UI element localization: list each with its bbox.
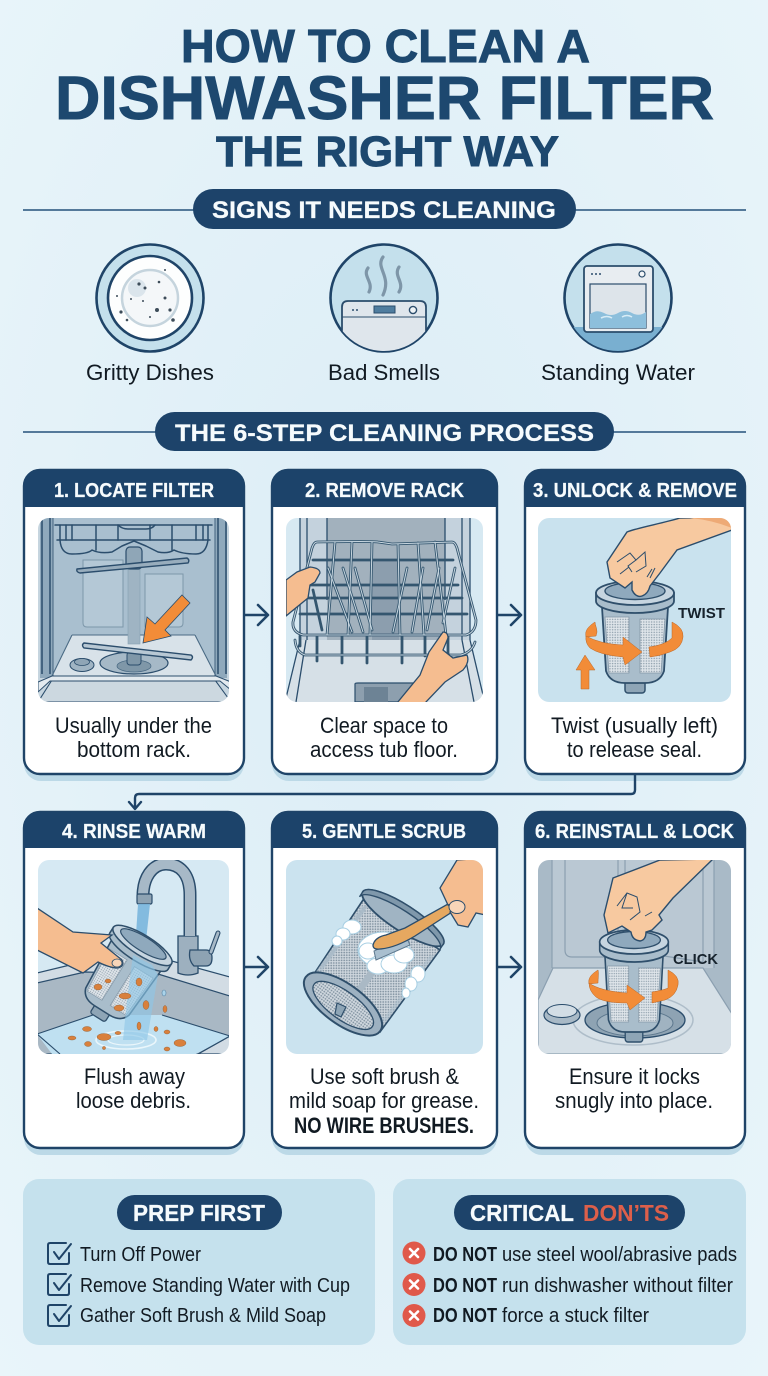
- panel: critical don'ts: [393, 1179, 746, 1345]
- caption: step 4: loose debris.: [76, 1088, 191, 1113]
- caption: step 3: Twist (usually left): [551, 713, 718, 738]
- label: bad smells: Bad Smells: [328, 360, 440, 385]
- section heading: signs it needs cleaning: [23, 189, 746, 229]
- arrow: step 1 to 2: [245, 605, 268, 625]
- heading: critical don'ts: [454, 1195, 685, 1230]
- title: THE RIGHT WAY: [216, 128, 559, 176]
- warning list: DO NOT: [433, 1305, 497, 1327]
- heading: prep first: PREP FIRST: [133, 1200, 265, 1226]
- heading: step 6: 6. REINSTALL & LOCK: [535, 821, 735, 843]
- warning list: use steel wool/abrasive pads: [502, 1244, 737, 1266]
- illustration: scrubbing filter with brush: [286, 858, 486, 1054]
- heading: critical don'ts: CRITICAL: [470, 1200, 574, 1226]
- caption: step 4: [76, 1064, 191, 1113]
- caption: step 3: [551, 713, 718, 762]
- icon: bad smells appliance: [330, 244, 438, 360]
- illustration: dishwasher interior with arrow: [38, 518, 231, 702]
- arrow: step 3 to 4 connector: [129, 775, 635, 809]
- arrow: step 4 to 5: [245, 957, 268, 977]
- label: gritty dishes: Gritty Dishes: [86, 360, 214, 385]
- icon: gritty dishes plate: [96, 244, 204, 352]
- illustration: hands removing rack: [286, 518, 483, 703]
- caption: step 5: [289, 1064, 479, 1138]
- checklist: [48, 1243, 350, 1327]
- caption: step 3: to release seal.: [567, 737, 702, 762]
- heading: step 1: 1. LOCATE FILTER: [54, 480, 215, 502]
- title: HOW TO CLEAN A: [181, 20, 590, 72]
- illustration: rinsing filter under faucet: [37, 860, 230, 1054]
- label: standing water: Standing Water: [541, 360, 695, 385]
- warning list: force a stuck filter: [502, 1305, 649, 1327]
- caption: step 5: NO WIRE BRUSHES.: [294, 1113, 474, 1138]
- arrow: step 2 to 3: [498, 605, 521, 625]
- heading: step 5: 5. GENTLE SCRUB: [302, 821, 466, 843]
- caption: step 6: snugly into place.: [555, 1088, 713, 1113]
- heading: step 2: 2. REMOVE RACK: [305, 480, 465, 502]
- caption: step 1: Usually under the: [55, 713, 212, 738]
- icon: standing water dishwasher: [563, 243, 673, 353]
- caption: step 6: [555, 1064, 713, 1113]
- heading: critical don'ts: DON’TS: [583, 1200, 669, 1226]
- heading: step 4: 4. RINSE WARM: [62, 821, 206, 843]
- panel: prep first: [23, 1179, 375, 1345]
- warning list: DO NOT: [433, 1275, 497, 1297]
- panel: step 6 reinstall and lock: [525, 812, 745, 1155]
- caption: step 6: Ensure it locks: [569, 1064, 700, 1089]
- warning list: [402, 1242, 737, 1327]
- title: DISHWASHER FILTER: [55, 64, 714, 132]
- section heading: the 6-step cleaning process: THE 6-STEP CLEANING PROCESS: [175, 420, 594, 447]
- panel: step 1 locate filter: [24, 470, 244, 781]
- panel: step 5 gentle scrub: [272, 812, 497, 1155]
- caption: step 1: bottom rack.: [77, 737, 191, 762]
- caption: step 5: mild soap for grease.: [289, 1088, 479, 1113]
- section heading: signs it needs cleaning: SIGNS IT NEEDS CLEANING: [212, 197, 556, 224]
- warning list: run dishwasher without filter: [502, 1275, 733, 1297]
- checklist: Gather Soft Brush & Mild Soap: [80, 1305, 326, 1327]
- label: click: CLICK: [673, 951, 718, 968]
- title: [55, 20, 714, 176]
- checklist: Remove Standing Water with Cup: [80, 1275, 350, 1297]
- panel: step 4 rinse warm: [24, 812, 244, 1155]
- section heading: the 6-step cleaning process: [23, 412, 746, 451]
- caption: step 2: Clear space to: [320, 713, 448, 738]
- illustration: twisting filter out: [538, 517, 732, 702]
- caption: step 1: [55, 713, 212, 762]
- caption: step 4: Flush away: [84, 1064, 185, 1089]
- heading: step 3: 3. UNLOCK & REMOVE: [533, 480, 737, 502]
- label: twist: TWIST: [678, 605, 725, 622]
- caption: step 2: [310, 713, 458, 762]
- checklist: Turn Off Power: [80, 1244, 201, 1266]
- heading: prep first: [117, 1195, 282, 1230]
- caption: step 2: access tub floor.: [310, 737, 458, 762]
- panel: step 3 unlock and remove: [525, 470, 745, 781]
- warning list: DO NOT: [433, 1244, 497, 1266]
- caption: step 5: Use soft brush &: [310, 1064, 459, 1089]
- panel: step 2 remove rack: [272, 470, 497, 781]
- arrow: step 5 to 6: [498, 957, 521, 977]
- illustration: reinstalling filter in sump: [538, 859, 732, 1054]
